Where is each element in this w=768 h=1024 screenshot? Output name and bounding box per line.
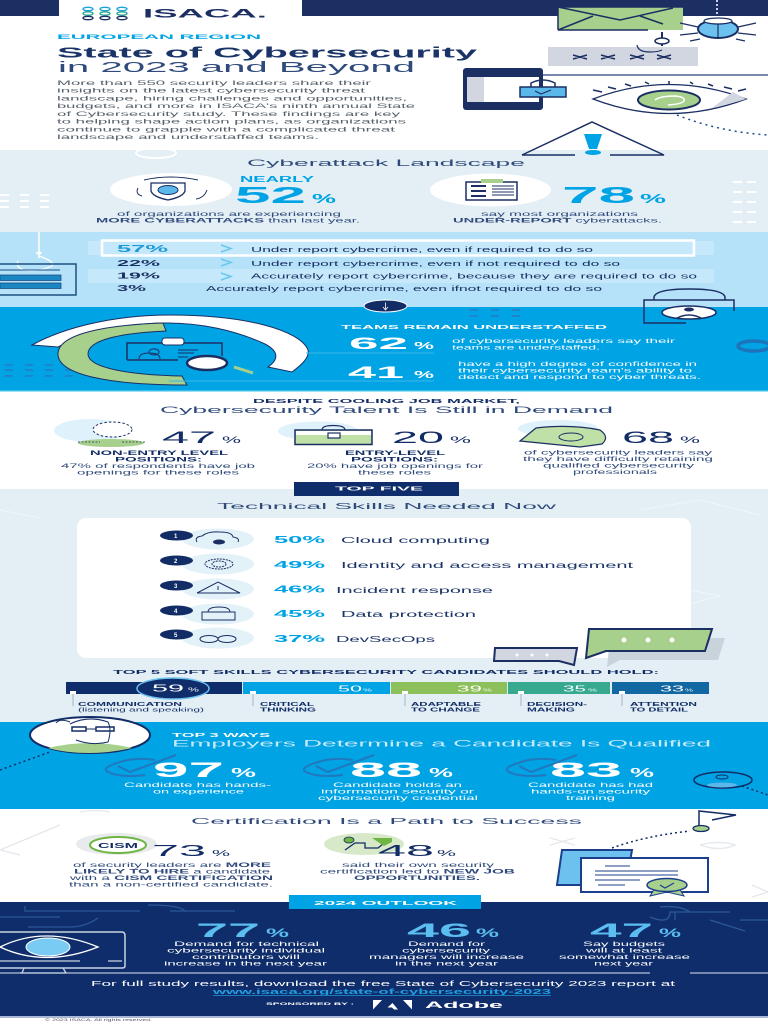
soft skill labels: ATTENTION [630,702,697,708]
skill 2: 2 [174,559,178,565]
stat: 77 percent: Demand for technical [174,941,320,948]
icon: flag [612,811,736,848]
soft skill labels: ADAPTABLE [411,702,482,708]
soft skills bar chart: % [483,688,492,692]
panel: employers determine [0,717,768,809]
stat: 77 percent: 77 [196,920,260,942]
panel: cyberattack landscape [0,148,768,233]
stat: 88 percent: Candidate holds an [333,782,463,789]
stat: 52 percent [96,173,360,224]
row: 22 percent: 22% [117,258,161,268]
stat: 88 percent: 88 [350,759,423,782]
row: 22 percent [117,258,620,268]
label: top five [294,482,459,496]
icon: monitor eye [0,932,125,973]
stat: 97 percent [106,755,271,796]
stat: 78 percent: UNDER-REPORT cyberattacks. [453,218,662,224]
skill 4: 45% [274,608,327,620]
soft skill labels: CRITICAL [260,702,315,708]
stat: 41 percent: detect and respond to cyber threats. [458,374,701,381]
skill 3: 3 [174,584,178,590]
soft skills bar chart [66,678,709,706]
skill 1: Cloud computing [341,536,490,545]
soft skill labels: DECISION- [527,702,587,708]
stat: 73 percent [68,833,274,888]
intro paragraph: insights on the latest cybersecurity threat [57,88,365,94]
soft skills bar chart: % [685,688,693,692]
dotted path [677,115,768,135]
sponsor: Adobe [425,1000,503,1011]
card: skills list [77,518,691,658]
stat: 73 percent: of security leaders are MORE [73,862,273,869]
skill 2: 49% [274,559,327,571]
stat: 41 percent: have a high degree of confidence in [458,361,698,368]
stat: 46 percent: in the next year [395,960,500,968]
stat: 47 percent: will at least [584,948,662,954]
stat: 83 percent: hands-on security [531,788,652,796]
soft skills bar chart: 59 [152,684,185,694]
title: State of Cybersecurity [57,44,479,62]
heading: DESPITE COOLING JOB MARKET, [253,399,522,405]
stat: 48 percent: 48 [378,843,434,860]
stat: 48 percent: certification led to NEW JOB [320,868,516,876]
icon: user lock [644,289,734,323]
stat: 68 percent: they have difficulty retaining [523,456,714,463]
stat: 20 percent: ENTRY-LEVEL [345,451,446,457]
row: 3 percent: Accurately report cybercrime, even ifnot required to do so [206,286,602,293]
label: 2024 outlook [289,895,481,909]
stat: 73 percent: CISM [98,843,138,850]
intro paragraph: landscape and understaffed teams. [57,134,319,141]
intro paragraph [57,80,416,141]
soft skill labels: THINKING [260,708,316,714]
soft skills bar chart: 33 [660,684,685,694]
stat: 46 percent: Demand for [408,941,487,948]
stat: 52 percent: NEARLY [240,175,316,184]
intro paragraph: budgets, and more in ISACA's ninth annual State [57,103,416,110]
skill 3: Incident response [336,586,494,595]
stat: 41 percent: 41 [348,364,404,382]
stat: 83 percent: % [630,766,654,780]
intro paragraph: of Cybersecurity study. These findings are key [57,111,401,118]
eyebrow: EUROPEAN REGION [57,34,262,41]
stat: 41 percent: their cybersecurity team's ability to [458,368,693,374]
panel: 2024 outlook [0,895,768,1018]
soft skill labels [78,702,697,714]
skill 4: 4 [174,609,178,615]
heading: TEAMS REMAIN UNDERSTAFFED [341,325,608,331]
stat: 77 percent: increase in the next year [164,960,329,968]
heading: soft skills: TOP 5 SOFT SKILLS CYBERSECURITY CANDIDATES SHOULD HOLD: [113,670,660,676]
stat: 68 percent: % [680,435,700,445]
stat: 77 percent [164,920,329,968]
heading: Cyberattack Landscape [247,158,525,168]
panel: technical skills [0,482,768,723]
stat: 47 percent: somewhat increase [559,954,691,961]
soft skill labels: TO DETAIL [630,708,689,714]
soft skills bar chart: 35 [563,684,587,694]
label: 2024 outlook: 2024 OUTLOOK [314,901,457,907]
row: 57 percent [117,243,593,255]
skill 5: DevSecOps [336,635,435,644]
stat: 46 percent: 46 [407,920,471,942]
stat: 97 percent: % [231,766,256,780]
stat: 68 percent: qualified cybersecurity [543,462,696,470]
phone and lock illustration [463,68,566,110]
stat: 77 percent: contributors will [192,954,301,961]
label: top five: TOP FIVE [335,486,426,492]
avatar [30,717,150,753]
title [57,44,479,76]
panel: teams remain understaffed [0,289,768,392]
intro paragraph: landscape, hiring challenges and opportunities, [57,96,407,102]
stat: 20 percent: 20% have job openings for [307,463,485,470]
stat: 88 percent [304,755,479,802]
panel: cybercrime reporting [0,232,768,307]
stat: 62 percent: teams are understaffed. [452,344,600,352]
gauge graphic [32,315,308,385]
skill 4 [160,604,476,624]
stat: 68 percent: 68 [622,429,674,447]
stat: 46 percent: % [476,926,500,940]
stat: 48 percent: said their own security [342,862,496,869]
arrow: down [364,300,407,312]
stat: 77 percent: cybersecurity individual [167,948,326,954]
soft skill labels: MAKING [527,708,575,714]
stat: 46 percent [369,920,525,968]
heading [160,399,613,416]
soft skills bar chart: % [188,688,199,694]
stat: 47 percent: openings for these roles [77,470,241,476]
stat: 47 percent: Say budgets [583,941,667,948]
stat: 83 percent: training [566,795,616,802]
row: 3 percent [117,283,602,293]
stat: 47 percent: NON-ENTRY LEVEL [90,451,229,457]
stat: 52 percent: % [312,191,337,206]
warning triangle [522,122,664,155]
stat: 62 percent: % [414,341,434,352]
intro paragraph: More than 550 security leaders share their [57,80,373,87]
skill 4: Data protection [341,610,476,619]
skill 5 [160,628,435,648]
logo card [59,0,302,26]
heading: Employers Determine a Candidate Is Qualified [172,738,711,750]
stat: 47 percent: 47% of respondents have job [61,463,256,470]
skill 1 [160,528,490,550]
skill 1: 1 [174,534,178,540]
stat: 78 percent [430,174,667,224]
row: 3 percent: 3% [117,283,147,293]
title: in 2023 and Beyond [58,60,415,76]
stat: 97 percent: Candidate has hands- [124,782,271,789]
icon: user badge [694,772,768,795]
stat: 77 percent: % [266,926,290,940]
skill 3 [160,578,494,600]
stat: 52 percent: of organizations are experiencing [117,211,342,218]
stat: 78 percent: % [640,191,667,206]
row: 57 percent: Under report cybercrime, even if required to do so [251,247,593,254]
stat: 62 percent: 62 [349,334,408,353]
skill 5: 5 [174,633,178,639]
stat: 88 percent: % [429,766,453,780]
stat: 97 percent: on experience [153,788,245,796]
icon: certificate [557,850,708,896]
row: 19 percent: Accurately report cybercrime, because they are required to do so [251,274,697,280]
eye illustration [593,81,746,114]
stat: 68 percent: professionals [573,469,659,476]
stat: 46 percent: managers will increase [369,954,525,961]
panel: certification [0,810,768,897]
stat: 20 percent: % [450,435,471,445]
stat: 48 percent: % [437,848,457,858]
panel: talent demand [54,399,714,476]
header band [0,0,768,16]
stat: 68 percent: of cybersecurity leaders say [524,450,714,456]
stat: 47 percent: 47 [590,920,653,942]
stat: 83 percent [507,755,654,802]
stat: 20 percent: these roles [358,470,433,476]
stat: 47 percent: 47 [162,429,216,447]
stat: 41 percent [169,361,701,382]
row: 19 percent: 19% [117,270,161,280]
stat: 88 percent: information security or [321,788,476,796]
soft skills bar chart: 50 [338,684,363,694]
stat: 83 percent: 83 [550,759,622,782]
stat: 47 percent: next year [594,960,655,968]
stat: 20 percent: POSITIONS: [351,458,438,464]
soft skill labels: (listening and speaking) [78,708,204,714]
stat: 68 percent [518,420,714,476]
stat: 62 percent [306,334,677,353]
stat: 48 percent [320,833,516,882]
stat: 73 percent: % [212,848,231,858]
logo card: ISACA. [143,8,267,20]
row: 22 percent: Under report cybercrime, even if not required to do so [251,261,620,268]
stat: 47 percent: POSITIONS: [115,458,202,464]
stat: 20 percent [278,422,485,476]
copyright: © 2023 ISACA. All rights reserved. [45,1018,152,1022]
soft skills bar chart: % [588,688,597,692]
stat: 73 percent: than a non-certified candidate. [69,882,273,888]
stat: 62 percent: of cybersecurity leaders say their [452,338,677,345]
stat: 20 percent: 20 [392,429,444,447]
stat: 47 percent: % [659,926,682,940]
sponsor [266,1000,503,1011]
skill 1: 50% [274,534,327,546]
row: 19 percent [117,270,697,280]
stat: 78 percent: say most organizations [481,211,640,218]
soft skills bar chart: 39 [457,684,484,694]
stat: 48 percent: OPPORTUNITIES. [354,875,480,882]
call to action: www.isaca.org/state-of-cybersecurity-2023 [211,989,551,996]
sponsor: SPONSORED BY : [266,1001,354,1006]
call to action [91,981,675,996]
soft skill labels: COMMUNICATION [78,702,182,708]
stat: 41 percent: % [414,370,434,381]
skill 2 [160,554,635,574]
heading [172,733,711,750]
stat: 88 percent: cybersecurity credential [318,795,479,802]
stat: 83 percent: Candidate has had [528,782,654,789]
stat: 78 percent: 78 [562,182,636,208]
call to action: For full study results, download the free State of Cybersecurity 2023 report at [91,981,675,988]
intro paragraph: continue to grapple with a complicated threat [57,126,395,134]
skill 5: 37% [274,633,327,645]
intro paragraph: to helping shape action plans, as organizations [57,118,407,126]
heading: Technical Skills Needed Now [217,501,559,511]
skill 3: 46% [274,584,327,596]
stat: 47 percent [559,920,691,968]
top right illustration cluster [540,0,768,75]
stat: 52 percent: 52 [235,182,306,208]
skill 2: Identity and access management [341,561,635,570]
heading: TOP 3 WAYS [172,733,272,739]
stat: 73 percent: with a CISM CERTIFICATION [68,875,274,882]
server icon [0,232,76,295]
stat: 47 percent: % [222,435,241,445]
soft skill labels: TO CHANGE [411,708,481,714]
stat: 52 percent: MORE CYBERATTACKS than last year. [96,218,360,224]
soft skills bar chart: % [363,688,372,692]
stat: 97 percent: 97 [153,759,224,782]
speech bubbles [494,629,725,667]
row: 57 percent: 57% [117,243,170,255]
heading: Certification Is a Path to Success [191,816,582,826]
heading: Cybersecurity Talent Is Still in Demand [160,405,613,416]
stat: 73 percent: 73 [152,843,206,860]
stat: 46 percent: cybersecurity [402,948,492,954]
stat: 73 percent: LIKELY TO HIRE a candidate [74,868,271,876]
stat: 47 percent [54,419,256,476]
